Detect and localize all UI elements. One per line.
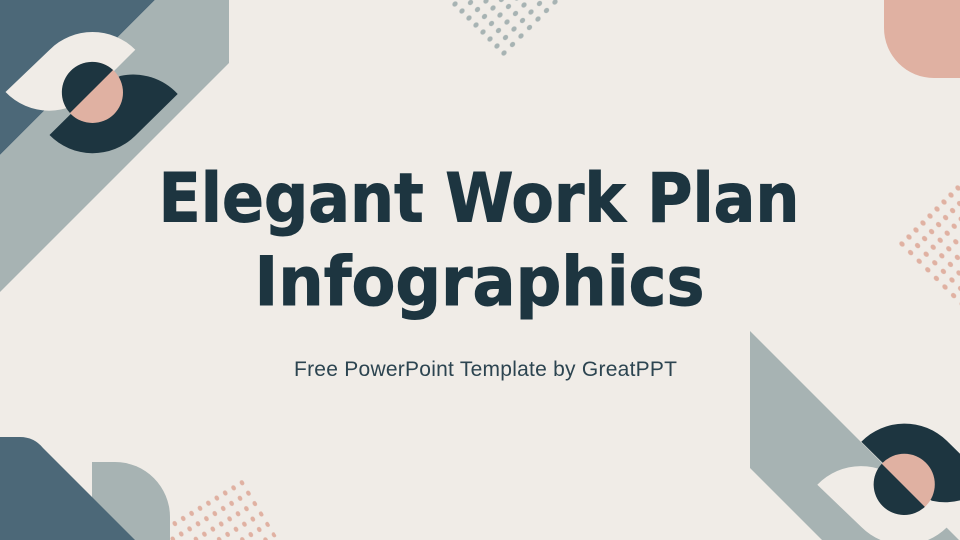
top-left geometric decoration [0, 0, 229, 292]
bottom-right geometric decoration [750, 331, 960, 540]
mirrored eye and circle icon [817, 424, 960, 540]
top-right pink rounded shape [884, 0, 960, 78]
icon: dark eye shape [861, 424, 960, 502]
title [158, 160, 800, 322]
icon: split circle [874, 454, 935, 515]
title line 2: Infographics [254, 243, 704, 322]
icon: split circle [62, 62, 123, 123]
bottom dot pattern [170, 478, 279, 540]
blue corner triangle [0, 0, 155, 155]
gray diagonal band [0, 0, 229, 292]
gray quarter shape [92, 462, 170, 540]
subtitle: Free PowerPoint Template by GreatPPT [294, 358, 677, 381]
bottom-left geometric decoration [0, 437, 170, 540]
gray diagonal band [750, 331, 960, 540]
title line 1: Elegant Work Plan [158, 160, 800, 239]
icon: light eye shape [817, 466, 947, 540]
icon: light eye shape [6, 32, 135, 111]
right dot pattern [897, 181, 960, 307]
icon: dark eye shape [50, 75, 178, 153]
blue rounded shape [0, 437, 135, 540]
top dot pattern [446, 0, 562, 58]
